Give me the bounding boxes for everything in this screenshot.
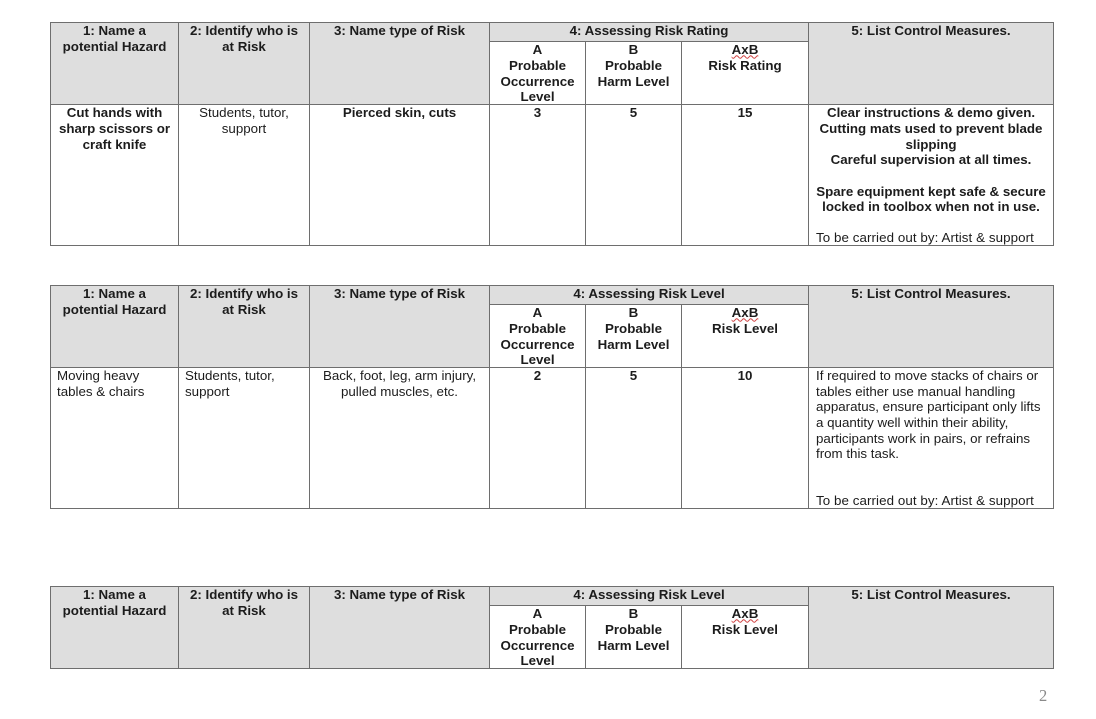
heading: list control measures: 5: List Control Measures. — [851, 286, 1011, 301]
heading: assessing risk level: 4: Assessing Risk Level — [573, 286, 725, 301]
subheading: B probable harm level: Probable — [605, 622, 662, 637]
cell: control measures: Clear instructions & demo given. — [827, 105, 1035, 120]
cell: hazard — [59, 105, 170, 152]
subheading: B probable harm level: Harm Level — [598, 337, 669, 352]
subheading: AxB risk rating: Risk Rating — [708, 58, 782, 73]
heading: name a potential hazard: 1: Name a — [83, 23, 146, 38]
cell: type of risk: Back, foot, leg, arm injury, — [323, 368, 476, 383]
cell: hazard: Moving heavy — [57, 368, 139, 383]
subheading: A probable occurrence level: Probable — [509, 58, 566, 73]
subheading: A probable occurrence level — [500, 606, 575, 668]
heading: list control measures: 5: List Control Measures. — [851, 23, 1011, 38]
cell: control measures: slipping — [905, 137, 957, 152]
cell: hazard: craft knife — [83, 137, 146, 152]
cell: who is at risk: Students, tutor, — [199, 105, 289, 120]
cell: control measures: Spare equipment kept safe & secure — [816, 184, 1046, 199]
subheading: AxB risk level — [712, 606, 778, 637]
subheading: B probable harm level: Harm Level — [598, 74, 669, 89]
cell: control measures — [816, 368, 1040, 461]
subheading: B probable harm level: B — [629, 42, 638, 57]
cell: B value: 5 — [630, 105, 637, 120]
table 2: moving furniture risk assessment — [50, 285, 1054, 509]
subheading: AxB risk level: Risk Level — [712, 622, 778, 637]
subheading: B probable harm level: Harm Level — [598, 638, 669, 653]
subheading: A probable occurrence level: Occurrence — [500, 337, 575, 352]
heading: name a potential hazard: 1: Name a — [83, 286, 146, 301]
subheading: AxB risk level: AxB — [732, 606, 758, 621]
cell: type of risk: Pierced skin, cuts — [343, 105, 456, 120]
cell: type of risk — [323, 368, 476, 399]
heading: identify who is at risk: at Risk — [222, 302, 266, 317]
cell: risk level value: 10 — [738, 368, 752, 383]
heading: identify who is at risk: at Risk — [222, 39, 266, 54]
cell: who is at risk: support — [222, 121, 266, 136]
cell: control measures: Cutting mats used to prevent blade — [820, 121, 1042, 136]
cell: hazard: tables & chairs — [57, 384, 144, 399]
subheading: A probable occurrence level: A — [533, 305, 542, 320]
table 1: sharp tools risk assessment — [50, 22, 1054, 246]
cell: risk rating value: 15 — [738, 105, 752, 120]
cell: control measures: locked in toolbox when not in use. — [822, 199, 1040, 214]
heading: identify who is at risk — [190, 286, 298, 317]
heading: name a potential hazard: potential Hazard — [63, 302, 166, 317]
cell: hazard: Cut hands with — [67, 105, 162, 120]
subheading: A probable occurrence level: A — [533, 42, 542, 57]
heading: assessing risk rating: 4: Assessing Risk Rating — [570, 23, 728, 38]
subheading: B probable harm level: Probable — [605, 321, 662, 336]
subheading: A probable occurrence level — [500, 305, 575, 367]
subheading: A probable occurrence level: A — [533, 606, 542, 621]
heading: list control measures: 5: List Control Measures. — [851, 587, 1011, 602]
cell: control measures: from this task. — [816, 446, 899, 461]
subheading: AxB risk level — [712, 305, 778, 336]
subheading: AxB risk rating — [708, 42, 782, 73]
cell: who is at risk: Students, tutor, — [185, 368, 275, 383]
heading: name a potential hazard — [63, 587, 166, 618]
subheading: A probable occurrence level — [500, 42, 575, 104]
heading: name a potential hazard: potential Hazard — [63, 603, 166, 618]
cell: B value: 5 — [630, 368, 637, 383]
heading: identify who is at risk: 2: Identify who is — [190, 286, 298, 301]
subheading: A probable occurrence level: Occurrence — [500, 74, 575, 89]
heading: name a potential hazard — [63, 286, 166, 317]
subheading: B probable harm level: B — [629, 305, 638, 320]
cell: control measures: Careful supervision at all times. — [831, 152, 1031, 167]
subheading: A probable occurrence level: Occurrence — [500, 638, 575, 653]
cell: control measures: apparatus, ensure participant only lifts — [816, 399, 1040, 414]
subheading: A probable occurrence level: Level — [520, 89, 555, 104]
cell: control measures: a quantity well within their ability, — [816, 415, 1008, 430]
subheading: A probable occurrence level: Level — [520, 352, 555, 367]
subheading: B probable harm level: Probable — [605, 58, 662, 73]
cell: carried out by: To be carried out by: Artist & support — [816, 493, 1034, 508]
heading: name a potential hazard — [63, 23, 166, 54]
heading: identify who is at risk — [190, 23, 298, 54]
page number: 2 — [1039, 686, 1047, 705]
subheading: B probable harm level — [598, 606, 669, 653]
cell: hazard: sharp scissors or — [59, 121, 170, 136]
cell: who is at risk: support — [185, 384, 229, 399]
heading: assessing risk level: 4: Assessing Risk Level — [573, 587, 725, 602]
cell: control measures: If required to move stacks of chairs or — [816, 368, 1038, 383]
heading: identify who is at risk: 2: Identify who is — [190, 23, 298, 38]
subheading: AxB risk level: AxB — [732, 305, 758, 320]
subheading: AxB risk rating: AxB — [732, 42, 758, 57]
heading: identify who is at risk: 2: Identify who is — [190, 587, 298, 602]
subheading: A probable occurrence level: Level — [520, 653, 555, 668]
subheading: B probable harm level: B — [629, 606, 638, 621]
heading: identify who is at risk — [190, 587, 298, 618]
cell: control measures: participants work in pairs, or refrains — [816, 431, 1030, 446]
cell: carried out by: To be carried out by: Artist & support — [816, 230, 1034, 245]
cell: hazard — [57, 368, 144, 399]
cell: type of risk: pulled muscles, etc. — [341, 384, 458, 399]
heading: identify who is at risk: at Risk — [222, 603, 266, 618]
table 3: empty header row — [50, 586, 1054, 669]
cell: who is at risk — [185, 368, 275, 399]
cell: control measures — [816, 105, 1046, 214]
heading: name type of risk: 3: Name type of Risk — [334, 587, 465, 602]
cell: control measures: tables either use manual handling — [816, 384, 1015, 399]
heading: name type of risk: 3: Name type of Risk — [334, 23, 465, 38]
subheading: B probable harm level — [598, 42, 669, 89]
subheading: A probable occurrence level: Probable — [509, 321, 566, 336]
subheading: B probable harm level — [598, 305, 669, 352]
heading: name type of risk: 3: Name type of Risk — [334, 286, 465, 301]
cell: A value: 3 — [534, 105, 541, 120]
heading: name a potential hazard: potential Hazard — [63, 39, 166, 54]
cell: who is at risk — [199, 105, 289, 136]
subheading: AxB risk level: Risk Level — [712, 321, 778, 336]
heading: name a potential hazard: 1: Name a — [83, 587, 146, 602]
subheading: A probable occurrence level: Probable — [509, 622, 566, 637]
cell: A value: 2 — [534, 368, 541, 383]
